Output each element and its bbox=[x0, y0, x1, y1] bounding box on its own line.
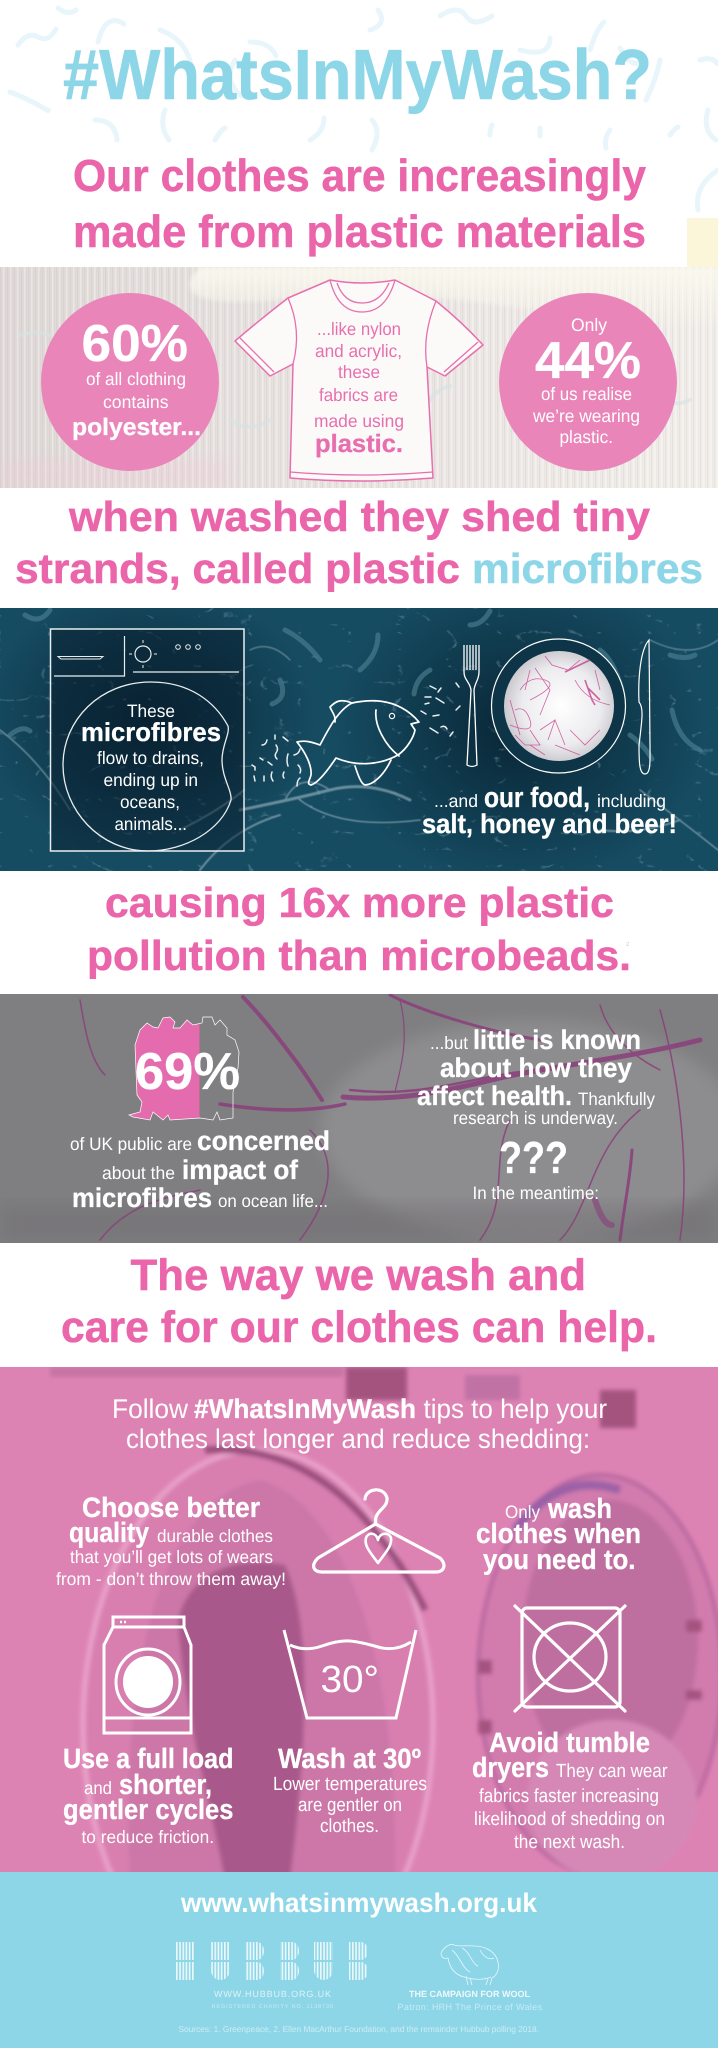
panel: footer bbox=[0, 1872, 718, 2048]
heading: microfibres: strands, called plastic bbox=[15, 545, 460, 592]
tip: wash at 30: Wash at 30º bbox=[278, 1743, 421, 1774]
campaign for wool text: Patron: HRH The Prince of Wales bbox=[398, 2002, 542, 2012]
panel: 44% circle: we’re wearing bbox=[532, 406, 640, 426]
panel: 44% circle: 44% bbox=[535, 332, 641, 390]
icon: washing machine: ending up in bbox=[104, 770, 198, 790]
icon: people silhouette bbox=[129, 1017, 239, 1120]
stat: 69%: on ocean life... bbox=[218, 1191, 328, 1211]
hubbub web address: WWW.HUBBUB.ORG.UK bbox=[214, 1989, 331, 1999]
tip: wash when needed: Only bbox=[505, 1502, 540, 1522]
stat: 69%: concerned bbox=[197, 1126, 330, 1156]
tip: full load: and bbox=[84, 1778, 112, 1798]
icon: fork bbox=[464, 645, 479, 766]
tip: wash at 30: clothes. bbox=[320, 1816, 379, 1837]
intro text: Follow bbox=[112, 1394, 188, 1424]
heading: pollution: pollution than microbeads. bbox=[87, 932, 631, 979]
panel: 44% circle: plastic. bbox=[560, 427, 613, 447]
stat: 69%: impact of bbox=[182, 1155, 299, 1185]
stat: 69%: about the bbox=[102, 1163, 175, 1183]
heading: pollution: 2 bbox=[626, 941, 630, 948]
tip: better quality: that you’ll get lots of wears bbox=[70, 1547, 273, 1567]
panel: 60% circle bbox=[41, 293, 219, 471]
tip: full load: shorter, bbox=[119, 1769, 212, 1800]
tip: wash when needed: clothes when bbox=[476, 1518, 641, 1549]
panel: fabric bbox=[0, 267, 718, 488]
t-shirt: fabrics are bbox=[319, 385, 398, 405]
icon: hanger bbox=[314, 1490, 444, 1572]
tip: better quality bbox=[56, 1492, 286, 1589]
text: little is known: Thankfully bbox=[578, 1089, 655, 1109]
caption: our food: our food, bbox=[484, 782, 590, 813]
tip: better quality: Choose better bbox=[82, 1492, 260, 1523]
title: #WhatsInMyWash? bbox=[63, 36, 652, 115]
text: little is known: research is underway. bbox=[453, 1108, 618, 1128]
caption: our food: salt, honey and beer! bbox=[422, 809, 677, 839]
panel: microscope fibres bbox=[0, 994, 718, 1243]
intro text bbox=[112, 1394, 607, 1454]
text: little is known: In the meantime: bbox=[472, 1183, 599, 1203]
tip: wash at 30 bbox=[274, 1748, 426, 1832]
text: little is known: ...but bbox=[430, 1033, 468, 1053]
tip: full load: to reduce friction. bbox=[82, 1827, 214, 1847]
heading: wash and care bbox=[61, 1251, 657, 1352]
icon: knife bbox=[639, 640, 650, 774]
caption: our food bbox=[422, 782, 677, 839]
tip: full load: Use a full load bbox=[63, 1743, 234, 1774]
icon: washing machine: These bbox=[127, 701, 175, 721]
text: little is known bbox=[417, 1025, 655, 1203]
icon: washing machine: animals... bbox=[114, 814, 187, 834]
stat: 69%: microfibres bbox=[72, 1183, 212, 1213]
stat: 69%: of UK public are bbox=[70, 1134, 192, 1154]
tip: avoid tumble dryers: Avoid tumble bbox=[489, 1727, 650, 1758]
text: little is known: little is known bbox=[473, 1025, 641, 1055]
tip: wash when needed bbox=[476, 1493, 641, 1575]
tip: avoid tumble dryers: dryers bbox=[472, 1752, 549, 1783]
tip: avoid tumble dryers: likelihood of shedding on bbox=[474, 1809, 665, 1830]
panel: washing tips bbox=[0, 1367, 718, 1872]
heading: microfibres bbox=[15, 493, 703, 592]
intro text: clothes last longer and reduce shedding: bbox=[126, 1424, 590, 1454]
stat: 69%: 69% bbox=[135, 1043, 240, 1101]
tip: avoid tumble dryers bbox=[472, 1727, 668, 1853]
heading: plastic materials: Our clothes are increasingly bbox=[73, 150, 646, 201]
icon: washing machine: microfibres bbox=[81, 717, 221, 747]
heading: pollution bbox=[87, 879, 631, 979]
t-shirt bbox=[235, 280, 483, 481]
campaign for wool text: THE CAMPAIGN FOR WOOL bbox=[409, 1989, 530, 1999]
microfibre strands bbox=[252, 683, 460, 786]
icon: top-loader washer bbox=[104, 1617, 191, 1733]
heading: wash and care: care for our clothes can help. bbox=[61, 1303, 657, 1352]
logo: sheep bbox=[441, 1944, 499, 1985]
hubbub web address bbox=[212, 1989, 333, 2010]
heading: pollution: causing 16x more plastic bbox=[105, 879, 614, 926]
t-shirt: plastic. bbox=[315, 430, 403, 458]
icon: washing machine: flow to drains, bbox=[97, 748, 204, 768]
tip: avoid tumble dryers: They can wear bbox=[556, 1761, 668, 1782]
sources: Sources: 1. Greenpeace, 2. Ellen MacArthur Foundation, and the remainder Hubbub polling 2018. bbox=[178, 2024, 539, 2034]
caption: our food: including bbox=[597, 791, 666, 811]
tip: wash when needed: you need to. bbox=[483, 1544, 636, 1575]
icon: no tumble dry bbox=[515, 1606, 625, 1711]
text: little is known: affect health. bbox=[417, 1081, 572, 1111]
tip: better quality: from - don’t throw them away! bbox=[56, 1569, 286, 1589]
t-shirt: made using bbox=[314, 411, 404, 431]
heading: microfibres: microfibres bbox=[472, 545, 703, 592]
heading: wash and care: The way we wash and bbox=[130, 1251, 586, 1300]
panel: 60% circle: contains bbox=[103, 392, 168, 412]
icon: fish bbox=[297, 701, 419, 785]
tip: better quality: durable clothes bbox=[157, 1526, 273, 1546]
heading: microfibres: when washed they shed tiny bbox=[68, 493, 651, 540]
website url: www.whatsinmywash.org.uk bbox=[180, 1888, 538, 1918]
hubbub web address: REGISTERED CHARITY NO. 1138730 bbox=[212, 2004, 333, 2010]
panel: 44% circle: of us realise bbox=[541, 384, 632, 404]
icon: plate with fibres bbox=[492, 639, 626, 773]
t-shirt: ...like nylon bbox=[317, 319, 401, 339]
panel: 60% circle: polyester... bbox=[72, 414, 201, 441]
caption: our food: ...and bbox=[434, 791, 478, 811]
tip: avoid tumble dryers: the next wash. bbox=[514, 1832, 625, 1853]
tip: better quality: quality bbox=[69, 1517, 149, 1548]
campaign for wool text bbox=[398, 1989, 542, 2012]
tip: full load bbox=[63, 1743, 234, 1847]
text: little is known: about how they bbox=[440, 1053, 632, 1083]
intro text: #WhatsInMyWash bbox=[194, 1394, 416, 1424]
text: little is known: ??? bbox=[499, 1132, 568, 1183]
stat: 69% bbox=[70, 1043, 330, 1213]
icon: 30 degree wash basin bbox=[284, 1630, 416, 1718]
intro text: tips to help your bbox=[424, 1394, 607, 1424]
tip: wash when needed: wash bbox=[547, 1493, 612, 1524]
tip: wash at 30: are gentler on bbox=[298, 1795, 402, 1816]
icon: washing machine bbox=[50, 629, 244, 851]
tip: wash at 30: Lower temperatures bbox=[273, 1774, 427, 1795]
icon: 30 degree wash basin: 30° bbox=[320, 1659, 379, 1701]
panel: 60% circle: of all clothing bbox=[86, 369, 186, 389]
t-shirt: and acrylic, bbox=[315, 341, 402, 361]
heading: plastic materials: made from plastic materials bbox=[73, 206, 646, 257]
logo: Hubbub bbox=[176, 1942, 368, 1980]
heading: plastic materials bbox=[73, 150, 646, 257]
panel: 44% circle: Only bbox=[571, 315, 607, 335]
icon: washing machine: oceans, bbox=[120, 792, 180, 812]
cream corner bbox=[687, 218, 718, 268]
tip: avoid tumble dryers: fabrics faster increasing bbox=[479, 1786, 659, 1807]
tip: full load: gentler cycles bbox=[63, 1794, 234, 1825]
panel: 60% circle: 60% bbox=[82, 315, 188, 373]
background squiggles bbox=[10, 8, 718, 210]
panel: 44% circle bbox=[499, 293, 677, 471]
t-shirt: these bbox=[338, 362, 380, 382]
panel: ocean bbox=[0, 608, 718, 871]
